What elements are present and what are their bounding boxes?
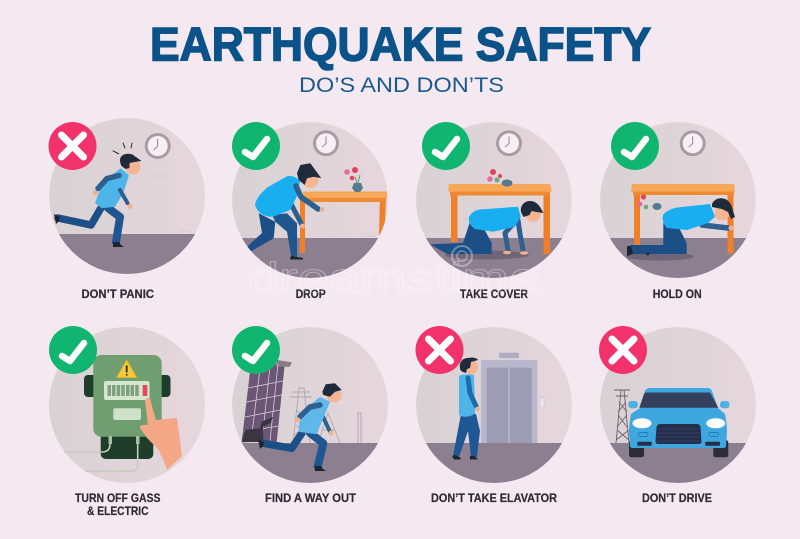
vase with flowers (344, 167, 363, 192)
scene: man running from building (232, 327, 388, 485)
label: & ELECTRIC (87, 506, 148, 518)
icon: red cross badge (48, 122, 96, 170)
subtitle: DO’S AND DON’TS (299, 73, 504, 97)
icon: pointing hand (140, 398, 182, 470)
label: TAKE COVER (460, 289, 529, 301)
label (75, 493, 161, 518)
tilted building (242, 360, 292, 442)
icon: clock (313, 130, 339, 156)
label: DON’T TAKE ELAVATOR (431, 493, 558, 505)
icon: red cross badge (599, 326, 647, 374)
power towers (290, 388, 361, 443)
table (300, 192, 387, 253)
table (631, 184, 735, 254)
icon: green check badge (232, 122, 280, 170)
label: DON’T PANIC (82, 289, 154, 301)
icon: green check badge (422, 122, 470, 170)
fallen vase and flowers (487, 169, 512, 186)
scene: man beside elevator (416, 327, 572, 485)
elevator (481, 353, 544, 443)
icon: green check badge (232, 326, 280, 374)
table (448, 184, 552, 254)
title: EARTHQUAKE SAFETY (150, 18, 651, 70)
panel: turn off gas and electric (49, 326, 205, 518)
panel: drop (232, 122, 388, 301)
label: HOLD ON (653, 289, 702, 301)
watermark (248, 246, 540, 301)
panel: don't panic (48, 118, 205, 301)
icon: clock (680, 130, 706, 156)
electric meter (64, 355, 170, 471)
panel: find a way out (232, 326, 388, 505)
icon: green check badge (611, 122, 659, 170)
scene: man under table (416, 122, 572, 283)
power tower (614, 390, 630, 443)
panel: don't drive (599, 326, 756, 505)
panel: don't take elevator (416, 326, 572, 505)
car (628, 388, 730, 457)
falling vase and flowers (638, 194, 662, 210)
scene: man holding table leg (600, 122, 756, 283)
panel: take cover (416, 122, 572, 301)
label: DROP (296, 289, 326, 301)
icon: warning triangle (117, 360, 137, 378)
icon: red cross badge (416, 326, 464, 374)
icon: green check badge (49, 326, 97, 374)
label: FIND A WAY OUT (265, 493, 356, 505)
scene: man dropping by table (232, 122, 388, 283)
panel: hold on (600, 122, 756, 301)
icon: clock (496, 130, 522, 156)
icon: clock (145, 133, 171, 159)
background circle (49, 327, 205, 483)
scene: car (600, 327, 756, 485)
label: TURN OFF GASS (75, 493, 161, 505)
man (452, 358, 480, 460)
label: DON’T DRIVE (642, 493, 712, 505)
scene: running man (49, 118, 205, 276)
watermark: dreamstime (248, 254, 540, 301)
